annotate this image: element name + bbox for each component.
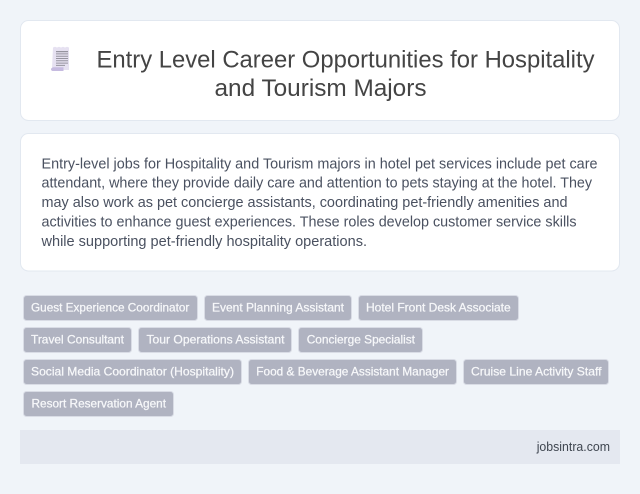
tag: Guest Experience Coordinator: [24, 296, 198, 320]
tag: Social Media Coordinator (Hospitality): [24, 360, 242, 384]
title: [96, 47, 594, 102]
tag: Travel Consultant: Travel Consultant: [31, 332, 125, 346]
panel: description card: [20, 134, 620, 271]
icon: paper receipt document: [51, 47, 69, 71]
tag: Event Planning Assistant: [204, 296, 352, 320]
tag: Hotel Front Desk Associate: [358, 296, 518, 320]
title: Entry Level Career Opportunities for Hospitality: [96, 47, 594, 74]
title: and Tourism Majors: [214, 75, 426, 102]
tag: Travel Consultant: [24, 328, 132, 352]
tag: Cruise Line Activity Staff: Cruise Line Activity Staff: [471, 364, 602, 378]
tag: Concierge Specialist: [298, 328, 422, 352]
tag: Hotel Front Desk Associate: Hotel Front Desk Associate: [366, 301, 511, 315]
tag: Event Planning Assistant: Event Planning Assistant: [212, 301, 345, 315]
tag list: [24, 296, 608, 416]
tag: Cruise Line Activity Staff: [464, 360, 608, 384]
description text: while supporting pet-friendly hospitality operations.: [40, 234, 367, 250]
tag: Food & Beverage Assistant Manager: Food & Beverage Assistant Manager: [256, 364, 449, 378]
footer source: jobsintra.com: [536, 440, 610, 454]
tag: Resort Reservation Agent: [24, 392, 174, 416]
description text: [40, 156, 598, 250]
description text: Entry-level jobs for Hospitality and Tourism majors in hotel pet services include pet care: [42, 156, 598, 172]
tag: Food & Beverage Assistant Manager: [248, 360, 456, 384]
tag: Resort Reservation Agent: Resort Reservation Agent: [32, 396, 167, 410]
tag: Tour Operations Assistant: [138, 328, 292, 352]
tag: Guest Experience Coordinator: Guest Experience Coordinator: [31, 301, 189, 315]
panel: title card: [20, 20, 620, 120]
description text: may also work as pet concierge assistants, coordinating pet-friendly amenities and: [42, 195, 568, 211]
description text: activities to enhance guest experiences. These roles develop customer service skills: [42, 214, 576, 230]
tag: Concierge Specialist: Concierge Specialist: [307, 332, 416, 346]
description text: attendant, where they provide daily care and attention to pets staying at the hotel. They: [42, 176, 593, 192]
footer bar: [20, 430, 620, 464]
tag: Social Media Coordinator (Hospitality): Social Media Coordinator (Hospitality): [31, 364, 234, 378]
tag: Tour Operations Assistant: Tour Operations Assistant: [146, 332, 285, 346]
